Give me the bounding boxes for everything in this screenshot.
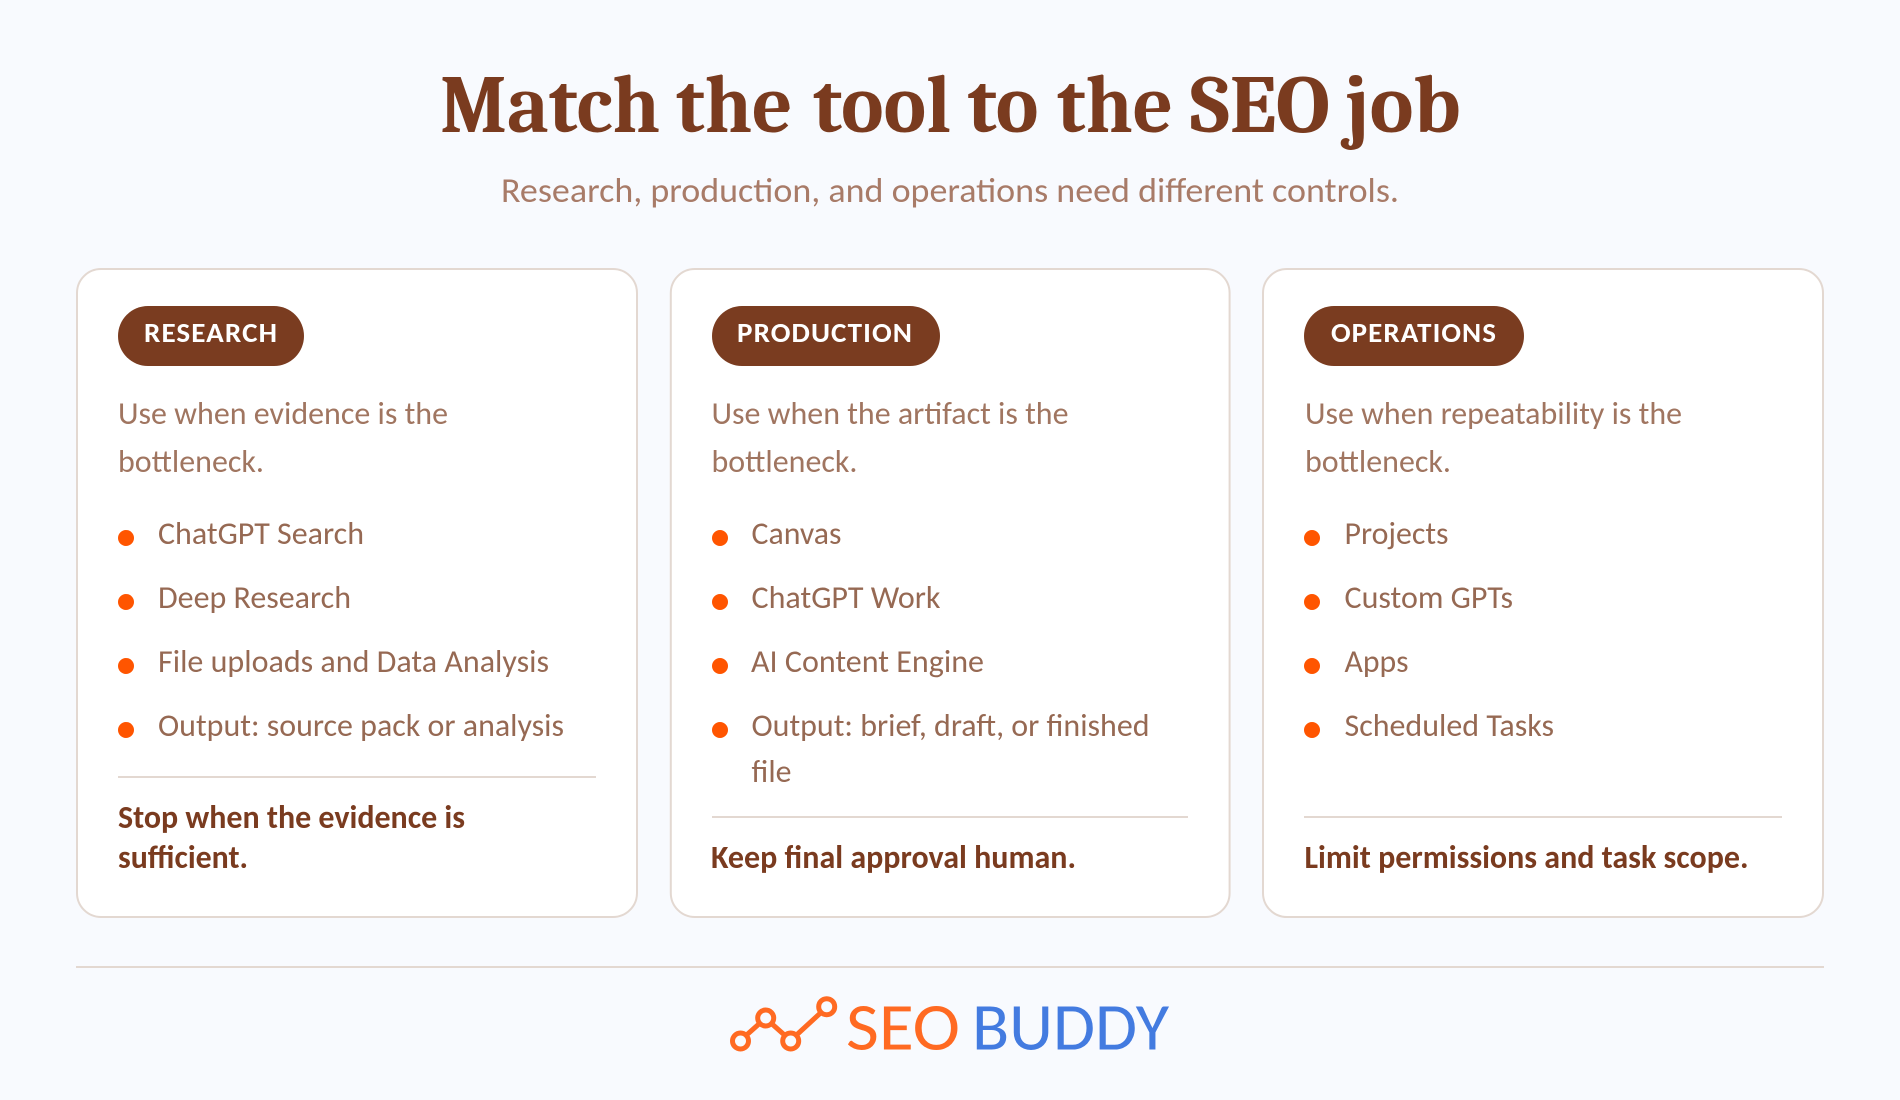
- list: research tools: Output: source pack or analysis: [158, 706, 564, 745]
- text: when to use production: Use when the artifact is the: [712, 394, 1068, 433]
- callout: research stop rule: sufficient.: [118, 838, 248, 877]
- callout: research stop rule: Stop when the evidence is: [118, 798, 465, 837]
- icon: trend line: [732, 999, 835, 1049]
- callout: production rule: Keep final approval human.: [711, 838, 1076, 877]
- callout: research stop rule: [118, 798, 465, 877]
- text: when to use production: bottleneck.: [712, 442, 858, 481]
- list: operations tools: Projects: [1344, 514, 1448, 553]
- list: production tools: AI Content Engine: [751, 642, 984, 681]
- text: when to use operations: bottleneck.: [1305, 442, 1451, 481]
- list: production tools: Output: brief, draft, or finished: [752, 706, 1150, 745]
- title: job: [1340, 58, 1460, 153]
- badge: research: [118, 306, 304, 366]
- text: when to use research: [118, 394, 448, 481]
- title: the: [1057, 58, 1173, 153]
- title: tool: [813, 58, 951, 153]
- text: when to use production: [712, 394, 1068, 481]
- title: the: [676, 58, 792, 153]
- list: operations tools: Scheduled Tasks: [1344, 706, 1554, 745]
- panel: operations: [1263, 269, 1823, 917]
- list: production tools: [712, 514, 1150, 791]
- subtitle: Research, production, and operations need different controls.: [501, 170, 1399, 212]
- list: operations tools: [1304, 514, 1554, 745]
- panel: production: [671, 269, 1230, 917]
- text: when to use operations: [1305, 394, 1682, 481]
- list: research tools: File uploads and Data Analysis: [158, 642, 549, 681]
- list: research tools: ChatGPT Search: [158, 514, 364, 553]
- text: when to use research: bottleneck.: [118, 442, 264, 481]
- text: when to use operations: Use when repeatability is the: [1305, 394, 1682, 433]
- list: research tools: Deep Research: [158, 578, 351, 617]
- badge: production: [712, 306, 940, 366]
- title: to: [968, 58, 1038, 153]
- badge: operations: [1304, 306, 1524, 366]
- list: production tools: file: [752, 752, 792, 791]
- callout: operations rule: Limit permissions and task scope.: [1304, 838, 1748, 877]
- badge: operations: OPERATIONS: [1331, 317, 1497, 350]
- list: production tools: Canvas: [752, 514, 842, 553]
- panel: research: [77, 269, 637, 917]
- title: [440, 58, 1460, 153]
- title: Match: [440, 58, 660, 153]
- logo: SEO Buddy: [732, 986, 1169, 1068]
- logo wordmark: BUDDY: BUDDY: [972, 986, 1169, 1068]
- text: when to use research: Use when evidence is the: [118, 394, 448, 433]
- title: SEO: [1190, 58, 1330, 153]
- list: production tools: ChatGPT Work: [752, 578, 941, 617]
- list: operations tools: Custom GPTs: [1344, 578, 1513, 617]
- list: research tools: [118, 514, 564, 745]
- badge: production: PRODUCTION: [737, 317, 913, 350]
- badge: research: RESEARCH: [144, 317, 278, 350]
- logo wordmark: SEO: SEO: [846, 986, 960, 1068]
- list: operations tools: Apps: [1344, 642, 1408, 681]
